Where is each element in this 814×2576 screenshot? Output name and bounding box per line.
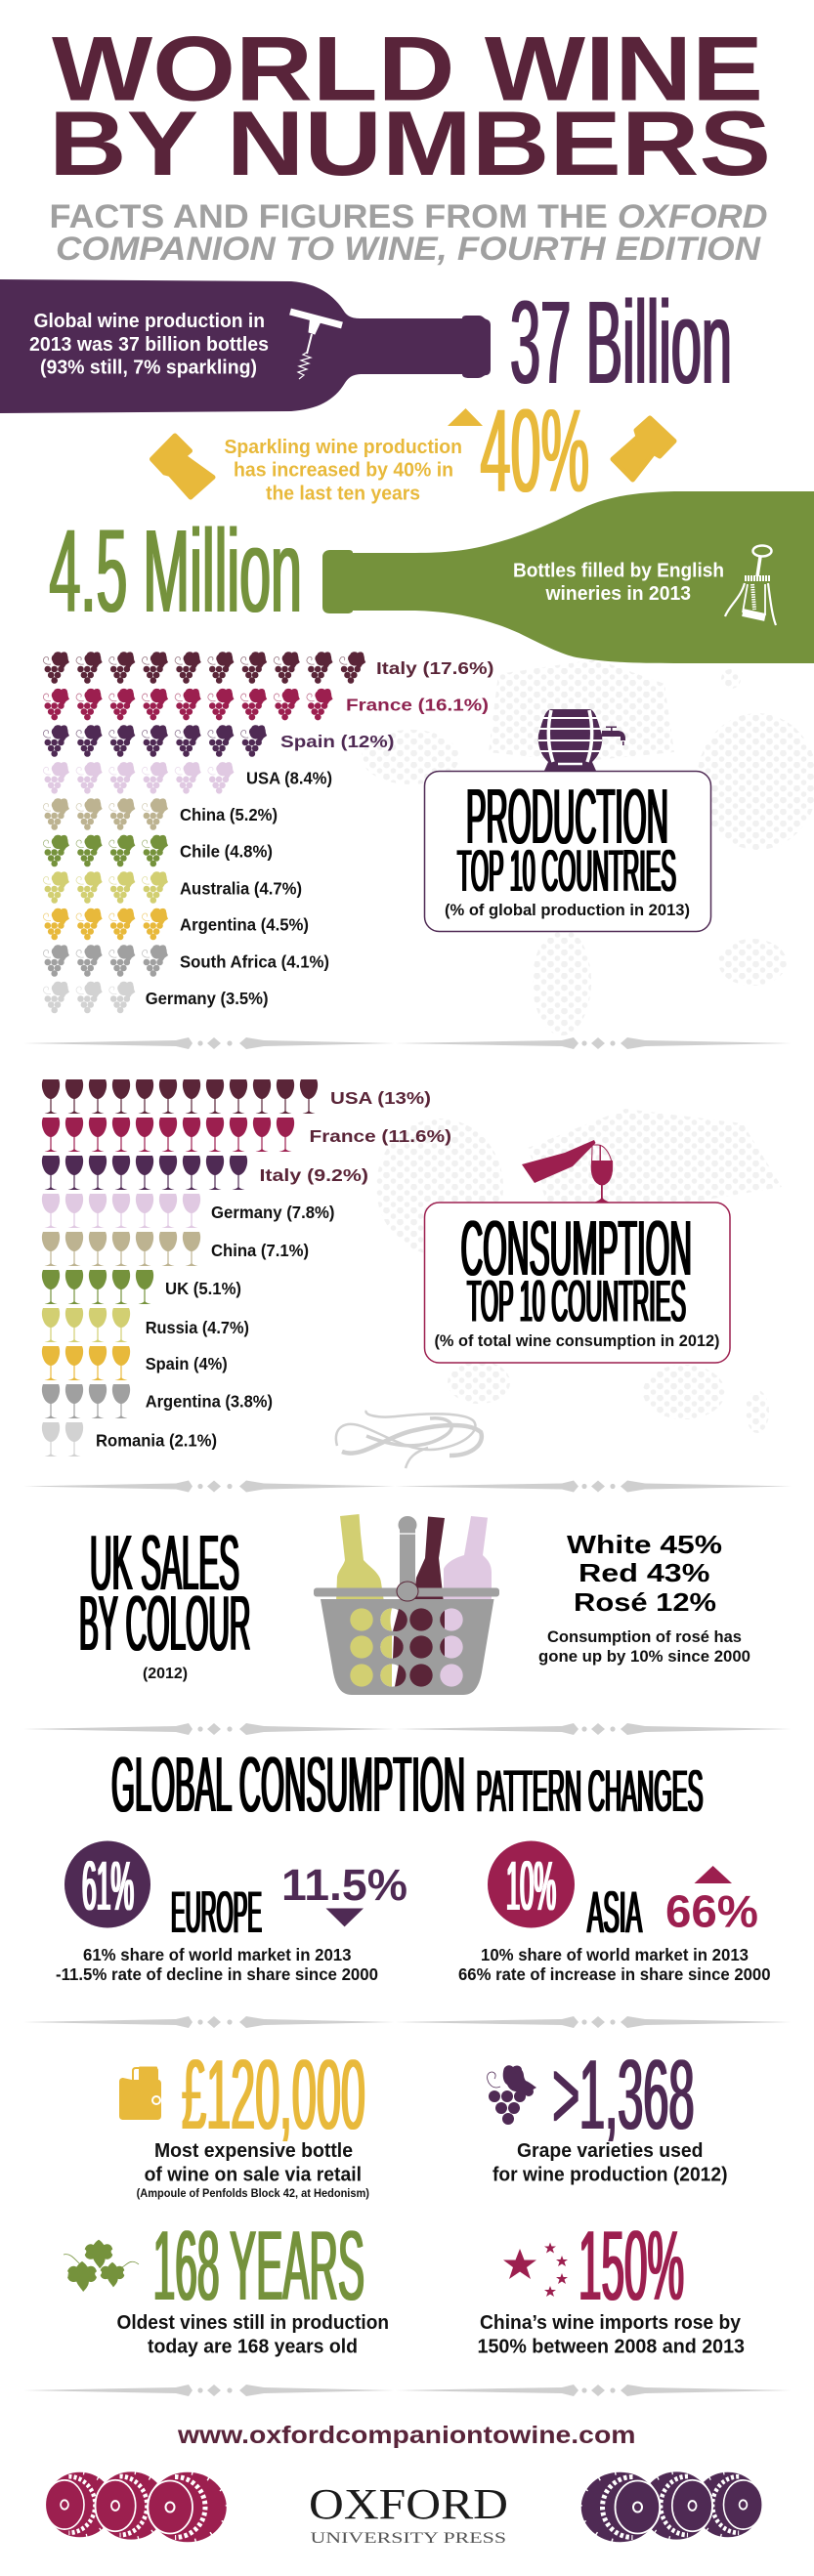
production: grape pictograph rows	[43, 652, 493, 1013]
green bottle: English wineries	[322, 491, 814, 663]
text: -11.5% rate of decline in share since 2000	[56, 1964, 378, 1984]
stat: 11.5%: 11.5%	[281, 1860, 407, 1910]
panel: production top 10	[424, 772, 711, 932]
stat: most expensive bottle: of wine on sale via retail	[145, 2165, 362, 2186]
text: £120,000	[182, 2041, 365, 2150]
row: Italy: Italy (9.2%)	[260, 1165, 368, 1185]
bottle text: (93% still, 7% sparkling)	[40, 358, 257, 379]
panel: Europe: EUROPE	[171, 1879, 262, 1945]
background world map: consumption	[376, 1109, 782, 1433]
stat: grape varieties: for wine production (2012)	[493, 2165, 727, 2186]
sparkling text	[225, 437, 462, 504]
row: Australia	[43, 871, 302, 904]
text: BY COLOUR	[79, 1580, 250, 1667]
row: Russia: Russia (4.7%)	[146, 1318, 249, 1337]
logo: Oxford University Press: UNIVERSITY PRESS	[311, 2530, 506, 2547]
icon: cork right	[613, 418, 674, 480]
row: USA: USA (8.4%)	[246, 769, 332, 788]
text: UK SALES	[90, 1519, 239, 1606]
stat: most expensive bottle: (Ampoule of Penfolds Block 42, at Hedonism)	[137, 2186, 369, 2200]
row: Italy	[42, 1156, 368, 1190]
row: Germany: Germany (3.5%)	[146, 989, 268, 1008]
divider	[23, 2385, 792, 2396]
icon: flourish	[336, 1411, 482, 1468]
sparkling text: Sparkling wine production	[225, 437, 462, 458]
stats: sales by colour: Consumption of rosé has	[547, 1627, 742, 1646]
row: Argentina	[42, 1384, 273, 1418]
panel: Europe	[56, 1840, 407, 1984]
divider	[23, 2016, 792, 2028]
stat: China imports: 150% between 2008 and 2013	[477, 2337, 745, 2358]
panel: consumption top 10	[424, 1203, 730, 1363]
row: Italy	[43, 652, 493, 684]
icon: vine leaves	[64, 2240, 139, 2292]
stats: sales by colour: Red 43%	[578, 1558, 709, 1587]
row: France	[42, 1118, 451, 1152]
icon: bottle pouring into glass	[522, 1140, 613, 1203]
row: USA	[43, 762, 332, 794]
bottle text	[29, 311, 269, 379]
title: WORLD WINE	[52, 18, 763, 119]
bottle text	[513, 561, 724, 605]
row: Argentina	[43, 908, 309, 940]
row: Argentina: Argentina (4.5%)	[180, 915, 309, 935]
text: 168 YEARS	[153, 2212, 364, 2321]
basket holes	[350, 1608, 463, 1687]
stat: oldest vines	[117, 2212, 389, 2358]
circle: 10%	[488, 1840, 575, 1928]
bottle text: Global wine production in	[33, 311, 265, 332]
icon: crimson barrels	[45, 2471, 228, 2543]
text: 40%	[481, 384, 589, 517]
icon: cork left	[152, 436, 213, 497]
icon: grapes	[488, 2065, 536, 2125]
divider	[23, 1723, 792, 1735]
arrow up: sparkling	[448, 408, 483, 426]
row: China	[42, 1232, 309, 1266]
divider	[23, 1037, 792, 1049]
sparkling text: has increased by 40% in	[234, 459, 453, 481]
stats: sales by colour: White 45%	[567, 1530, 722, 1559]
heading: UK sales by colour	[79, 1519, 250, 1682]
background world map: production	[362, 659, 814, 1035]
text: 66% rate of increase in share since 2000	[458, 1964, 771, 1984]
panel: Europe: 61%	[82, 1848, 134, 1925]
logo: Oxford University Press	[309, 2480, 508, 2547]
text: 4.5 Million	[49, 504, 302, 637]
circle: 61%	[64, 1840, 150, 1928]
row: China: China (5.2%)	[180, 805, 278, 824]
row: Spain	[43, 725, 394, 757]
icon: barrel with tap	[538, 709, 625, 771]
row: France: France (11.6%)	[309, 1126, 451, 1146]
row: Germany: Germany (7.8%)	[211, 1203, 334, 1222]
bottle text: 2013 was 37 billion bottles	[29, 334, 269, 356]
icon: purple barrels	[580, 2471, 763, 2543]
bottle text: Bottles filled by English	[513, 561, 724, 582]
row: South Africa	[43, 945, 329, 977]
arrow down	[326, 1909, 364, 1926]
row: Chile	[43, 835, 273, 866]
stat: most expensive bottle	[137, 2041, 369, 2200]
title	[49, 18, 771, 194]
stat: China imports: China’s wine imports rose by	[480, 2312, 742, 2334]
purple bottle: global production	[0, 279, 491, 413]
panel: Asia: 10%	[506, 1848, 556, 1925]
arrow up	[694, 1866, 732, 1883]
note: (% of global production in 2013)	[445, 901, 690, 919]
bottle text: wineries in 2013	[545, 583, 691, 605]
stat: grape varieties	[493, 2041, 727, 2186]
note: (% of total wine consumption in 2012)	[434, 1331, 719, 1350]
row: Spain: Spain (12%)	[280, 732, 395, 751]
icon: basket of bottles	[314, 1514, 499, 1695]
stats: sales by colour	[538, 1530, 750, 1666]
panel: Asia: ASIA	[587, 1879, 642, 1945]
row: Spain	[42, 1346, 228, 1380]
row: Chile: Chile (4.8%)	[180, 842, 273, 862]
stat: grape varieties: Grape varieties used	[517, 2140, 704, 2162]
row: Argentina: Argentina (3.8%)	[146, 1392, 273, 1412]
icon: corkscrew	[290, 312, 342, 379]
row: Germany	[43, 982, 269, 1013]
subtitle: COMPANION TO WINE, FOURTH EDITION	[56, 231, 762, 268]
row: China	[43, 798, 278, 830]
row: Spain: Spain (4%)	[146, 1354, 228, 1373]
divider	[23, 1481, 792, 1493]
row: UK: UK (5.1%)	[165, 1279, 241, 1298]
text	[56, 1945, 378, 1984]
row: UK	[42, 1270, 241, 1304]
row: USA: USA (13%)	[330, 1088, 431, 1108]
stats: sales by colour: gone up by 10% since 2000	[538, 1647, 750, 1666]
row: South Africa: South Africa (4.1%)	[180, 952, 329, 972]
icon: China flag stars	[503, 2243, 568, 2297]
consumption: wine glass pictograph rows	[42, 1079, 451, 1457]
row: France	[43, 689, 489, 720]
logo: Oxford University Press: OXFORD	[309, 2480, 508, 2528]
stat: most expensive bottle: Most expensive bottle	[154, 2140, 353, 2162]
heading: UK sales by colour: (2012)	[143, 1666, 188, 1682]
text	[458, 1945, 771, 1984]
row: Romania: Romania (2.1%)	[96, 1431, 217, 1451]
icon: wallet	[119, 2067, 161, 2120]
row: Germany	[42, 1194, 334, 1228]
text: 10% share of world market in 2013	[481, 1945, 749, 1964]
text: 61% share of world market in 2013	[83, 1945, 352, 1964]
subtitle	[49, 198, 767, 268]
stat: oldest vines: today are 168 years old	[148, 2337, 358, 2358]
sparkling text: the last ten years	[266, 483, 420, 504]
panel: Asia	[458, 1840, 771, 1984]
subtitle: FACTS AND FIGURES FROM THE OXFORD	[49, 198, 767, 235]
title: BY NUMBERS	[49, 92, 771, 194]
row: USA	[42, 1079, 431, 1114]
stats: sales by colour: Rosé 12%	[574, 1587, 716, 1617]
stat: China imports	[477, 2212, 745, 2358]
row: China: China (7.1%)	[211, 1241, 309, 1260]
row: Russia	[42, 1308, 249, 1342]
website URL: www.oxfordcompaniontowine.com	[177, 2422, 635, 2449]
icon: winged corkscrew	[725, 545, 776, 625]
stat: 66%: 66%	[665, 1885, 758, 1936]
row: Romania	[42, 1422, 217, 1457]
row: France: France (16.1%)	[346, 696, 489, 715]
stat: oldest vines: Oldest vines still in production	[117, 2312, 389, 2334]
row: Australia: Australia (4.7%)	[180, 879, 302, 899]
row: Italy: Italy (17.6%)	[376, 658, 494, 678]
